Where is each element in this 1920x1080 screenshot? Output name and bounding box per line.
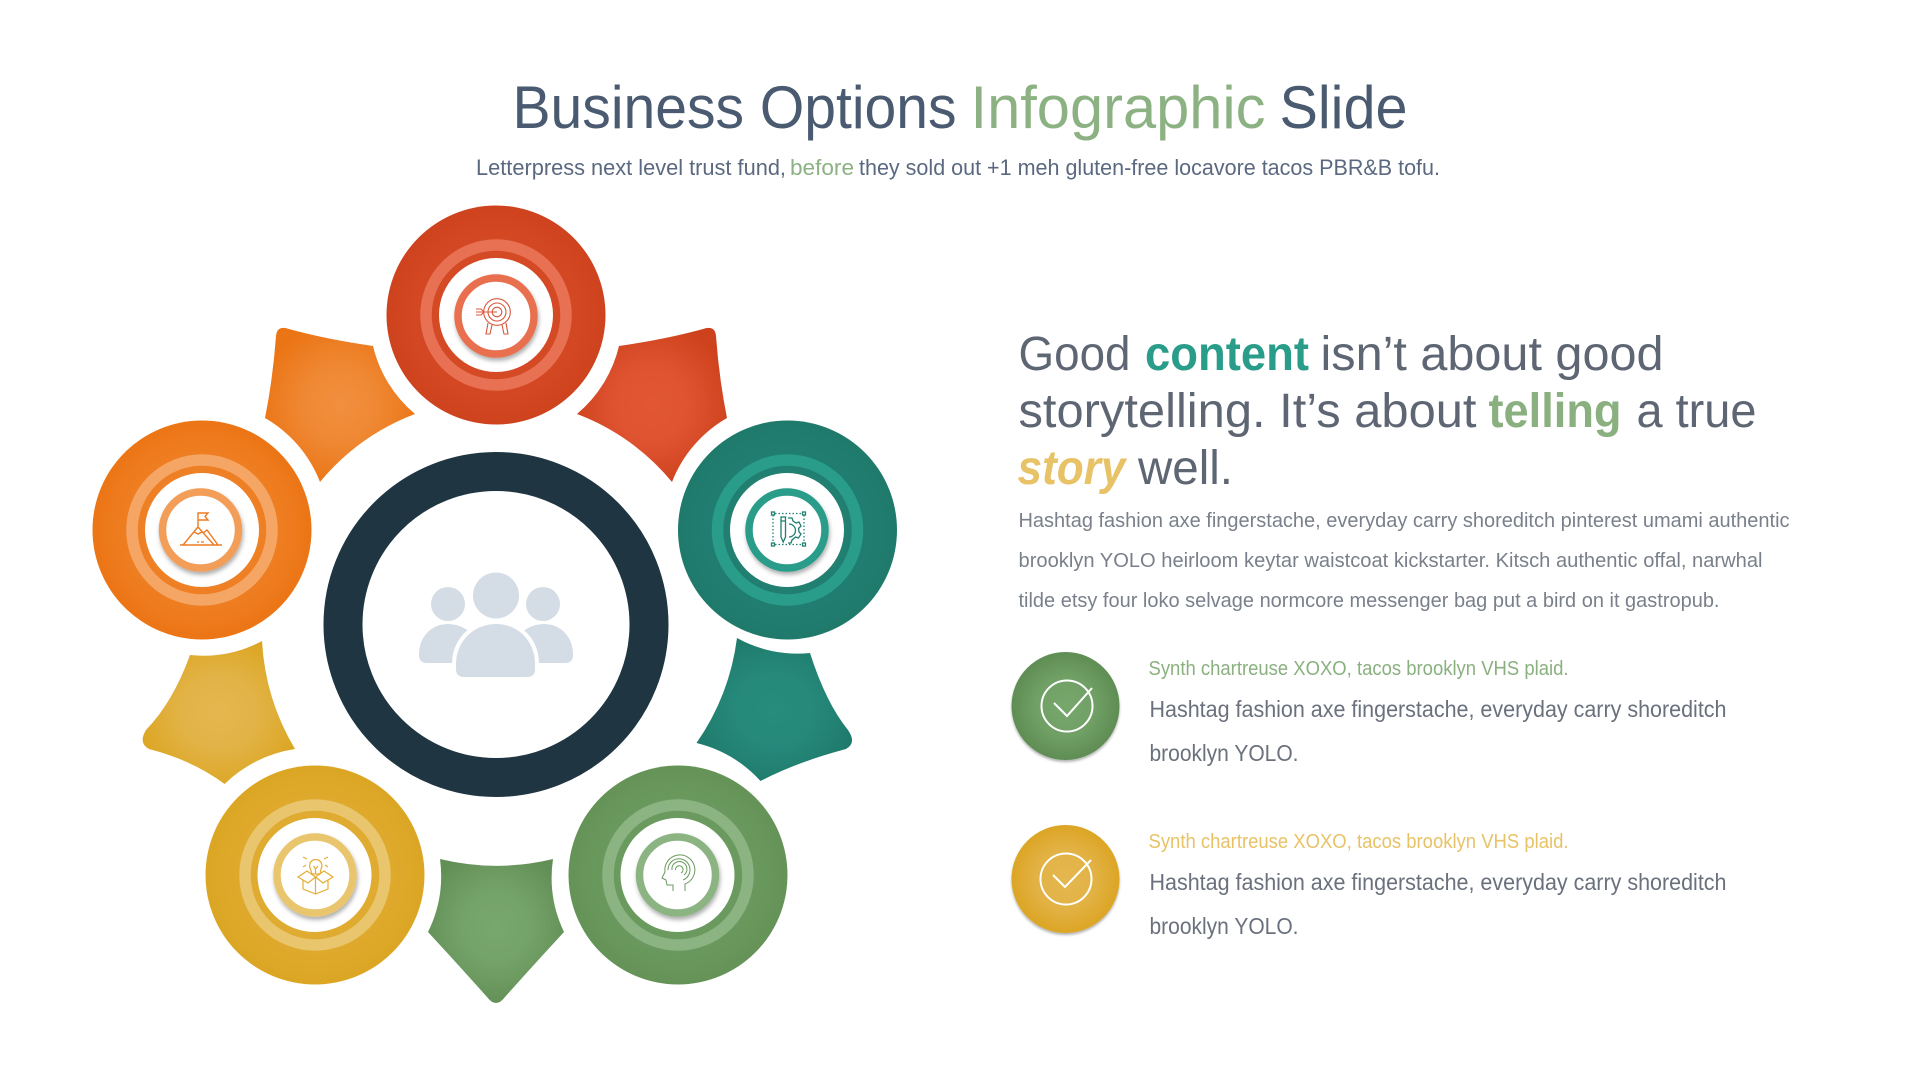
- title: Infographic: [970, 74, 1266, 141]
- list item: gold: Synth chartreuse XOXO, tacos brooklyn VHS plaid.: [1148, 831, 1568, 853]
- petal: teal: [696, 638, 852, 781]
- headline: telling: [1488, 385, 1622, 438]
- headline: Good: [1018, 328, 1130, 381]
- subtitle: [476, 155, 1440, 180]
- subtitle: before: [790, 155, 854, 180]
- icon: design tool: [772, 512, 806, 546]
- list item: gold: brooklyn YOLO.: [1150, 913, 1298, 939]
- subtitle: Letterpress next level trust fund,: [476, 155, 786, 180]
- list item: green: Hashtag fashion axe fingerstache, everyday carry shoreditch: [1150, 696, 1726, 722]
- icon: people group: [419, 572, 573, 677]
- headline: well.: [1137, 442, 1233, 495]
- headline: [1018, 328, 1756, 495]
- subtitle: they sold out +1 meh gluten-free locavore tacos PBR&B tofu.: [859, 155, 1440, 180]
- list item: green: Synth chartreuse XOXO, tacos brooklyn VHS plaid.: [1148, 658, 1568, 680]
- title: Business Options: [512, 74, 956, 141]
- badge: gold check: [1012, 825, 1120, 933]
- list item: green: [1148, 658, 1726, 766]
- badge: green check: [1012, 652, 1120, 760]
- icon: head maze: [662, 855, 695, 891]
- petal: red: [577, 328, 727, 482]
- headline: content: [1145, 328, 1309, 381]
- headline: storytelling. It’s about: [1018, 385, 1476, 438]
- title: [512, 74, 1408, 141]
- title: Slide: [1280, 74, 1408, 141]
- headline: a true: [1636, 385, 1756, 438]
- body paragraph: tilde etsy four loko selvage normcore messenger bag put a bird on it gastropub.: [1018, 590, 1720, 612]
- node: gold idea box: [206, 766, 424, 984]
- body paragraph: Hashtag fashion axe fingerstache, everyday carry shoreditch pinterest umami authentic: [1018, 510, 1790, 532]
- icon: mountain flag: [180, 513, 222, 545]
- petal: orange: [265, 328, 415, 482]
- petal: gold: [143, 641, 295, 784]
- icon: target: [476, 299, 510, 334]
- icon: box with lightbulb: [298, 857, 333, 894]
- node: orange mountain: [92, 420, 312, 640]
- center ring: [343, 472, 649, 778]
- headline: isn’t about good: [1320, 328, 1664, 381]
- list item: gold: [1148, 831, 1726, 939]
- node: red target: [386, 206, 606, 424]
- list item: gold: Hashtag fashion axe fingerstache, everyday carry shoreditch: [1150, 869, 1726, 895]
- headline: story: [1018, 442, 1128, 495]
- list item: green: brooklyn YOLO.: [1150, 740, 1298, 766]
- node: teal design: [678, 420, 897, 640]
- petal: green: [428, 859, 564, 1003]
- node: green head: [568, 766, 788, 984]
- body paragraph: [1018, 510, 1790, 612]
- body paragraph: brooklyn YOLO heirloom keytar waistcoat kickstarter. Kitsch authentic offal, narwhal: [1018, 550, 1762, 572]
